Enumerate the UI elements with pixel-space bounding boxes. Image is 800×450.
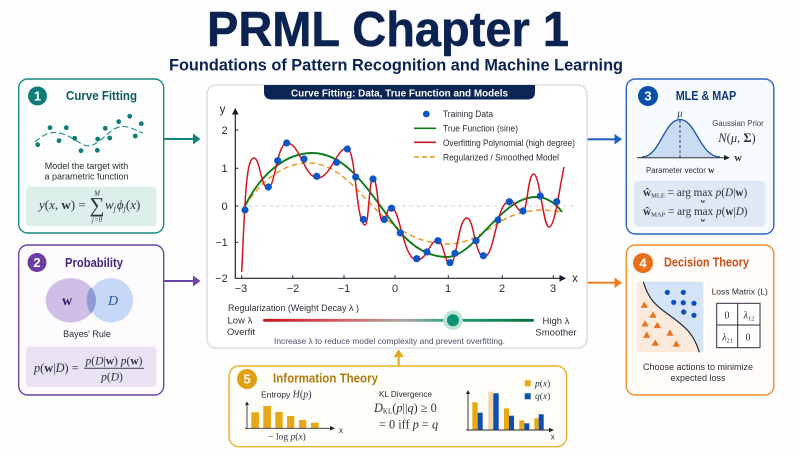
- badge 4: 4: [639, 256, 647, 271]
- entropy bar chart: Entropy H(p): [261, 390, 312, 400]
- comparison bar chart: x: [551, 432, 555, 442]
- regularization slider: [227, 303, 577, 338]
- formula: Bayes: p(w|D) =: [33, 361, 79, 375]
- bar chart legend: [525, 378, 550, 402]
- KL divergence text: p||q) ≥ 0: [396, 401, 437, 415]
- formula: Bayes: [26, 347, 156, 387]
- loss matrix: λ: [721, 332, 727, 344]
- axis labels: −1: [215, 237, 228, 249]
- badge 1: 1: [34, 88, 41, 104]
- panel: main chart: [207, 85, 587, 348]
- panel: MLE and MAP: [626, 79, 774, 234]
- axes: [232, 108, 566, 282]
- axis labels: 1: [445, 283, 451, 295]
- heading: information theory: Information Theory: [273, 372, 378, 386]
- formulas: MLE and MAP: = arg max: [665, 206, 716, 218]
- bar chart legend: q(x): [535, 391, 550, 402]
- comparison bar chart: [466, 390, 555, 442]
- panel: decision theory: [626, 245, 774, 395]
- loss matrix: 21: [726, 338, 733, 344]
- formulas: MLE and MAP: w: [701, 198, 706, 205]
- curve: overfitting polynomial: [242, 143, 564, 272]
- loss matrix: 0: [746, 332, 750, 344]
- gaussian prior chart: Parameter vector w: [646, 165, 715, 175]
- arrow: chart to MLE and MAP: [587, 134, 622, 144]
- panel: information theory: [229, 366, 567, 447]
- badge 3: [638, 86, 658, 106]
- regularization slider: Regularization (Weight Decay λ ): [228, 303, 359, 314]
- chart caption: Increase λ to reduce model complexity and prevent overfitting.: [274, 336, 505, 346]
- formulas: MLE and MAP: p(D|w): [716, 187, 747, 199]
- badge 4: [633, 253, 653, 273]
- formula: Bayes: p(D|w) p(w): [84, 356, 143, 368]
- entropy bar chart: x: [339, 426, 343, 435]
- axis labels: 2: [221, 125, 228, 137]
- gaussian prior chart: [637, 108, 764, 175]
- regularization slider: Smoother: [535, 328, 577, 338]
- title: PRML Chapter 1: [207, 3, 569, 57]
- venn diagram: D: [107, 294, 118, 309]
- panel: curve fitting: [19, 79, 164, 233]
- arrow: probability to chart: [164, 276, 200, 286]
- gaussian prior chart: N(μ, Σ): [717, 131, 756, 145]
- regularization slider: High λ: [543, 316, 570, 327]
- chart legend: Training Data: [443, 109, 493, 119]
- badge 3: 3: [644, 89, 652, 104]
- axis labels: −1: [338, 283, 350, 295]
- badge 5: [237, 369, 257, 389]
- badge 5: 5: [243, 372, 251, 387]
- formulas: MLE and MAP: [634, 181, 766, 227]
- axis labels: −3: [235, 283, 247, 295]
- arrow: chart to decision theory: [587, 278, 622, 288]
- KL divergence text: D: [373, 401, 383, 415]
- subtitle: Foundations of Pattern Recognition and Machine Learning: [169, 56, 623, 74]
- KL divergence text: = 0 iff p = q: [379, 418, 438, 432]
- loss matrix: 12: [748, 316, 754, 322]
- axis labels: −2: [287, 283, 299, 295]
- axis labels: 1: [221, 163, 228, 175]
- KL divergence text: KL: [383, 408, 392, 416]
- loss matrix: Loss Matrix (L): [712, 286, 768, 296]
- curve: true function: [245, 153, 562, 257]
- loss matrix: 0: [724, 310, 730, 322]
- chart title bar: Curve Fitting: Data, True Function and Models: [291, 87, 508, 99]
- gaussian prior chart: μ: [676, 108, 683, 120]
- axis labels: [215, 104, 578, 295]
- loss matrix: λ: [743, 310, 749, 322]
- KL divergence text: (: [392, 401, 396, 415]
- badge 1: [28, 86, 47, 106]
- caption: Bayes' rule: Bayes' Rule: [63, 329, 111, 339]
- chart legend: [414, 109, 575, 162]
- formulas: MLE and MAP: p(w|D): [716, 206, 748, 218]
- chart legend: True Function (sine): [443, 124, 518, 134]
- decision boundary plot: [637, 282, 703, 352]
- regularization slider: Low λ: [228, 316, 253, 326]
- formula: linear model: M: [93, 190, 101, 198]
- formula: Bayes: p(D): [100, 372, 123, 384]
- formula: linear model: (x, w) =: [45, 197, 86, 212]
- formula: linear model: [26, 187, 156, 226]
- axis labels: y: [220, 104, 226, 116]
- entropy bar chart: − log p(x): [268, 432, 306, 442]
- description text: expected loss: [670, 373, 726, 383]
- formula: linear model: ∑: [90, 193, 104, 217]
- KL divergence text: [373, 389, 438, 432]
- line chart: [215, 104, 578, 295]
- formulas: MLE and MAP: ŵ: [643, 187, 652, 199]
- description text: Choose actions to minimize: [643, 362, 753, 372]
- formulas: MLE and MAP: w: [701, 217, 706, 224]
- heading: decision theory: Decision Theory: [664, 256, 749, 270]
- formula: linear model: (: [126, 197, 130, 212]
- formulas: MLE and MAP: MLE: [651, 192, 665, 200]
- heading: curve fitting: Curve Fitting: [66, 89, 137, 103]
- badge 2: [28, 253, 46, 272]
- venn diagram: [46, 278, 133, 322]
- loss matrix: [712, 286, 768, 348]
- arrow: information theory to chart: [394, 350, 404, 366]
- description text: Model the target with: [45, 161, 128, 171]
- formulas: MLE and MAP: = arg max: [665, 187, 716, 199]
- formulas: MLE and MAP: MAP: [651, 212, 666, 218]
- description text: a parametric function: [44, 172, 129, 182]
- KL divergence text: KL Divergence: [379, 389, 432, 399]
- arrow: curve fitting to chart: [164, 134, 200, 144]
- axis labels: 0: [392, 283, 398, 295]
- axis labels: x: [572, 273, 578, 285]
- formula: linear model: j: [123, 204, 127, 213]
- gaussian prior chart: Gaussian Prior: [712, 119, 764, 128]
- badge 2: 2: [33, 255, 41, 270]
- panel: probability: [19, 245, 164, 395]
- formula: linear model: w: [105, 197, 114, 212]
- formula: linear model: y: [37, 197, 45, 212]
- chart legend: Overfitting Polynomial (high degree): [443, 138, 575, 148]
- regularization slider: Overfit: [227, 327, 255, 338]
- formulas: MLE and MAP: ŵ: [643, 206, 652, 218]
- heading: MLE and MAP: MLE & MAP: [676, 89, 736, 103]
- venn diagram: w: [62, 294, 73, 309]
- curve: regularized model: [245, 163, 561, 244]
- formula: linear model: j: [113, 204, 117, 213]
- icon: scatter with dashed curve: [35, 114, 144, 153]
- axis labels: 0: [221, 201, 228, 213]
- axis labels: −2: [215, 273, 228, 285]
- formula: linear model: x): [130, 197, 140, 212]
- bar chart legend: p(x): [534, 378, 550, 390]
- training data points: [241, 139, 560, 266]
- formula: linear model: j=0: [91, 216, 103, 224]
- axis labels: 3: [550, 283, 556, 295]
- axis labels: 2: [499, 283, 505, 295]
- formula: linear model: ϕ: [117, 197, 124, 212]
- heading: probability: Probability: [65, 256, 123, 270]
- entropy bar chart: [245, 390, 343, 442]
- chart legend: Regularized / Smoothed Model: [443, 152, 559, 162]
- gaussian prior chart: w: [734, 153, 742, 164]
